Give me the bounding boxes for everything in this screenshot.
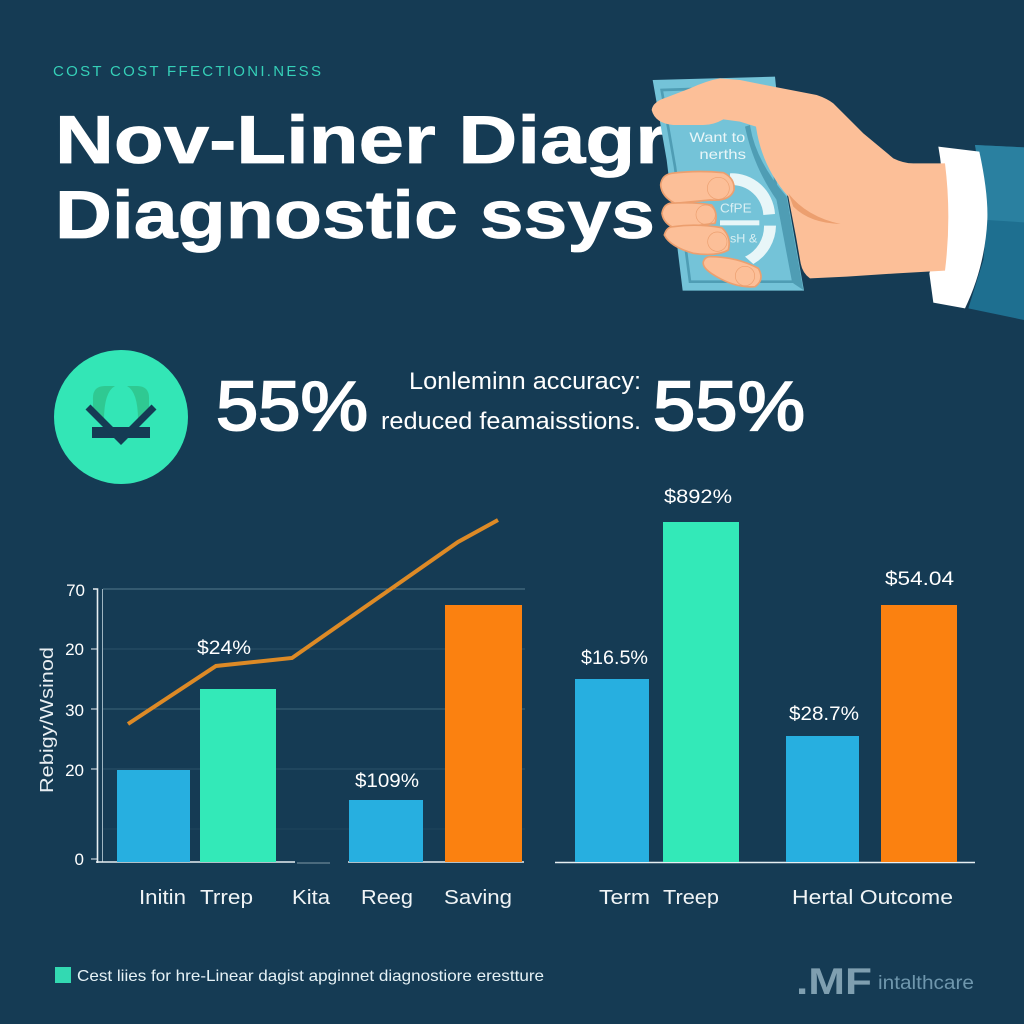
axes [91,589,524,863]
y-axis labels: 20 [65,640,84,659]
value labels: $892% [664,487,732,508]
fingernails [696,177,755,286]
value labels: $54.04 [885,569,955,590]
category labels: Initin [139,887,186,909]
gridlines [103,589,525,829]
stat: 55 percent right: 55% [653,367,805,445]
sleeve [968,145,1024,320]
y-axis labels [65,581,85,869]
banknote [653,77,804,291]
category labels: Hertal Outcome [792,887,953,909]
category labels: Treep [663,887,719,909]
stat: 55 percent left: 55% [216,367,368,445]
legend: Cest liies for hre-Linear dagist apginnet diagnostiore erestture [77,968,544,985]
category labels: Reeg [361,887,413,909]
stat description: Lonleminn accuracy: [409,368,641,395]
banknote: Want to [689,129,746,145]
logo [796,961,974,1002]
chart: left bar and line chart [37,520,525,909]
banknote: nerths [699,146,746,162]
banknote: CfPE [720,202,752,216]
banknote: sH & [730,232,757,246]
value labels: $24% [197,638,251,659]
category labels [599,887,953,909]
illustration: hand holding banknote [652,77,1024,320]
category labels: Saving [444,887,512,909]
title [55,102,667,253]
fingers [661,171,761,287]
trend line [128,520,498,724]
eyebrow label: COST COST FFECTIONI.NESS [53,63,321,80]
value labels: $16.5% [581,648,648,669]
bars [117,770,190,862]
stat description: reduced feamaisstions. [381,408,641,435]
category labels: Kita [292,887,331,909]
category labels [139,887,512,909]
value labels: $28.7% [789,704,859,725]
bars [575,679,649,862]
palm and thumb [652,78,948,278]
value labels: $109% [355,771,419,792]
y-axis title: Rebigy/Wsinod [37,647,57,793]
value labels [197,638,419,792]
y-axis labels: 70 [66,581,85,600]
category labels: Trrep [200,887,253,909]
icon: green circle badge with check [54,350,188,484]
shirt cuff [929,147,987,308]
title: Nov-Liner Diagr [55,102,667,178]
category labels: Term [599,887,650,909]
palm crease [788,193,841,224]
title: Diagnostic ssys [55,177,655,253]
y-axis labels: 20 [65,761,84,780]
stat description [381,368,641,435]
logo: intalthcare [878,973,974,994]
value labels [581,487,955,725]
y-axis labels: 30 [65,701,84,720]
chart: right bar chart [555,487,975,909]
logo: .MF [796,961,872,1002]
y-axis labels: 0 [75,850,84,869]
